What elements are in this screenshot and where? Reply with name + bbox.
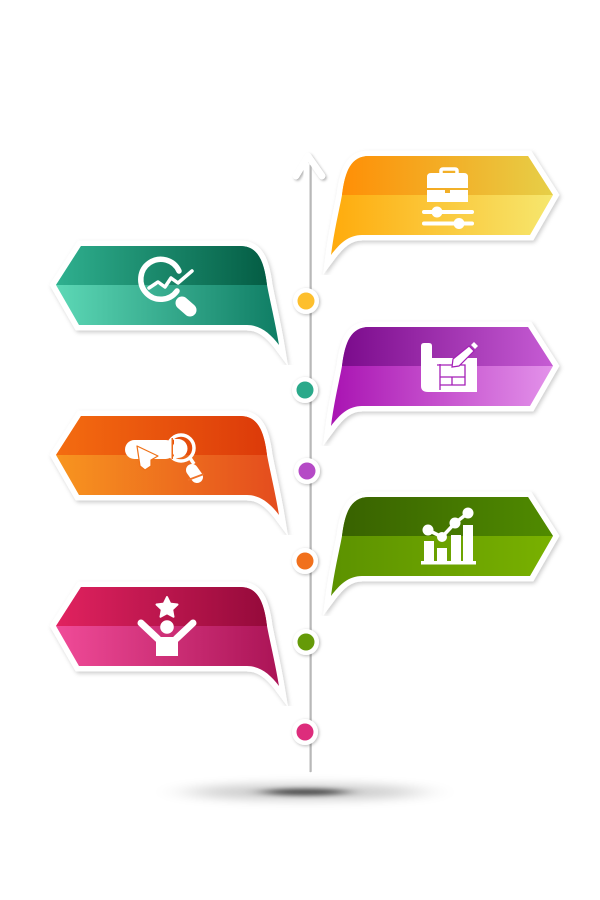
icon: blueprint and pencil	[421, 342, 478, 392]
icon: person with star	[141, 597, 193, 656]
marker: orange dot	[292, 548, 318, 574]
icon: magnifier with trend line	[141, 259, 192, 310]
marker: teal dot	[292, 377, 318, 403]
icon: bar chart with trend line	[421, 508, 476, 564]
panel: yellow banner	[331, 156, 553, 255]
marker: purple dot	[294, 458, 320, 484]
panel: pink banner	[56, 587, 279, 686]
panel: green banner	[331, 497, 553, 596]
icon: cursor and magnifier	[125, 435, 204, 480]
ground shadow	[187, 784, 423, 800]
icon: briefcase and sliders	[422, 169, 474, 229]
panel: purple banner	[331, 327, 553, 426]
panel: teal banner	[56, 246, 279, 345]
marker: pink dot	[292, 719, 318, 745]
marker: green dot	[293, 629, 319, 655]
timeline axis with arrow	[296, 156, 322, 771]
marker: yellow dot	[293, 288, 319, 314]
panel: orange banner	[56, 416, 279, 515]
